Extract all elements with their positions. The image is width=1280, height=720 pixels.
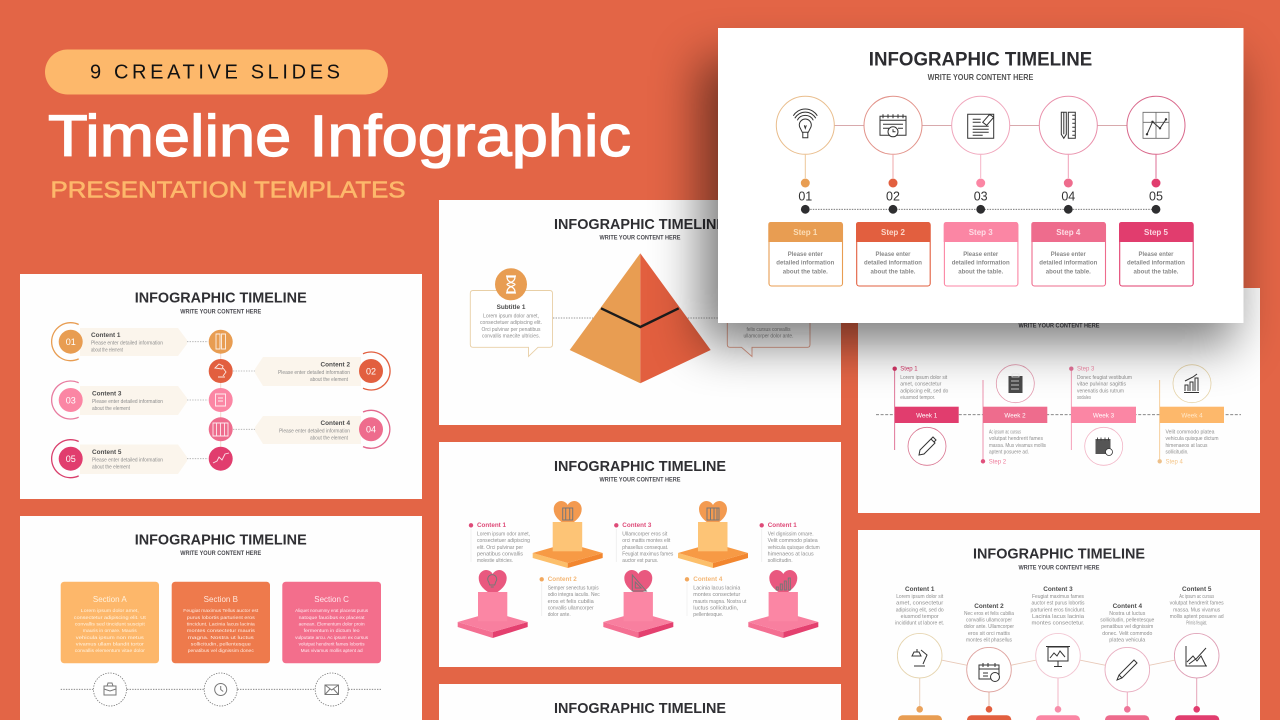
slide heading: WRITE YOUR CONTENT HERE xyxy=(180,308,261,315)
text: content 2: convallis ullamcorper xyxy=(548,606,594,612)
text: content 1: consectetuer adipiscing xyxy=(477,538,530,544)
slide heading: INFOGRAPHIC TIMELINE xyxy=(554,458,726,475)
week 4 column: himenaeos at lacus xyxy=(1166,443,1208,449)
item: content 4: Please enter detailed information xyxy=(279,428,350,434)
card: section C: Mus vivamus mollis aptent ad xyxy=(301,648,363,653)
panel: slide at the bottom centre: INFOGRAPHIC TIMELINE xyxy=(554,700,726,717)
step: content 1: Content 1 xyxy=(905,586,935,593)
text: content 4: Lacinia lacus lacinia xyxy=(693,586,741,592)
item: content 3: Please enter detailed information xyxy=(92,399,163,405)
step: content 3: Feugiat maximus fames xyxy=(1032,594,1084,600)
card: section A: convallis sed tincidunt suscipit xyxy=(75,622,146,626)
icon: bar chart xyxy=(1173,365,1211,403)
slide heading xyxy=(869,49,1092,82)
step: content 1: Lorem ipsum dolor sit xyxy=(896,594,944,600)
step: content 3: auctor est purus lobortis xyxy=(1032,601,1085,607)
item: content 4: 04 xyxy=(366,425,376,435)
item: content 1 xyxy=(52,323,208,361)
icon: document with pencil xyxy=(968,114,994,138)
step: content 5: massa. Mus vivamus xyxy=(1173,607,1221,613)
step: content 2 xyxy=(964,603,1014,720)
text: content 1: molestie ultricies. xyxy=(477,558,513,564)
item: content 3 xyxy=(52,381,208,419)
week 2 column: volutpat hendrerit fames xyxy=(989,436,1044,442)
item: content 2: Please enter detailed information xyxy=(278,370,350,376)
step 4: detailed information xyxy=(1039,260,1097,267)
step 3 xyxy=(944,96,1018,286)
item: content 3: Content 3 xyxy=(92,390,122,398)
icon: lamp on red disc xyxy=(209,359,233,383)
item: content 2 xyxy=(233,352,390,390)
item: content 5: Content 5 xyxy=(92,449,122,456)
icon: clock xyxy=(204,673,237,706)
item: content 4 xyxy=(233,410,390,448)
step: content 1 xyxy=(895,586,944,720)
item: content 3: 03 xyxy=(66,395,76,405)
week 2 column: Ac ipsum ac cursus xyxy=(989,430,1021,436)
step: content 1: amet, consectetur xyxy=(896,601,944,607)
text: content 1 right: vehicula quisque dictum xyxy=(768,545,820,551)
panel: slide with three sections xyxy=(20,516,422,720)
week 4 column: sollicitudin. xyxy=(1166,450,1188,456)
icon: document on pink disc xyxy=(209,388,233,412)
card: section B xyxy=(172,582,270,663)
panel: slide with pyramid xyxy=(439,200,841,425)
icon: envelope xyxy=(315,673,348,706)
icon: books on pink disc xyxy=(209,417,233,441)
step: content 1: incididunt ut labore et. xyxy=(895,621,944,627)
slide heading: INFOGRAPHIC TIMELINE xyxy=(869,49,1092,71)
step 5: 05 xyxy=(1149,189,1163,203)
week 1 column: adipiscing elit, sed do xyxy=(900,388,949,394)
week 2 column xyxy=(981,365,1047,466)
icon: calendar with clock xyxy=(880,114,906,137)
card: section A xyxy=(61,582,159,663)
slide heading: WRITE YOUR CONTENT HERE xyxy=(180,550,261,557)
step: content 4: donec. Velit commodo xyxy=(1102,631,1153,637)
step 4: 04 xyxy=(1061,189,1075,203)
icon: pencil and ruler xyxy=(1061,112,1075,138)
step 1: Step 1 xyxy=(793,228,818,237)
item: content 3: about the element xyxy=(92,406,131,412)
step: content 4: penatibus vel dignissim xyxy=(1101,624,1153,630)
step 1 xyxy=(768,96,843,286)
card: section C: Aliquet nonummy erat placerat purus xyxy=(295,608,369,613)
card: section C: fermentum in dictum leo xyxy=(304,628,360,633)
week 4 column: vehicula quisque dictum xyxy=(1166,436,1218,442)
text: content 3: auctor est purus. xyxy=(622,558,658,564)
item: content 2: about the element xyxy=(310,377,349,383)
item: content 5: 05 xyxy=(66,454,76,464)
step 2: detailed information xyxy=(864,260,922,267)
card: section B: Feugiat maximus Tellus auctor est xyxy=(183,608,259,613)
card: section A: consectetur adipiscing elit. Ut xyxy=(74,615,147,620)
text: content 2: odio integra iaculis. Nec xyxy=(548,592,600,598)
text: content 1 xyxy=(469,522,530,564)
week 1 column: Lorem ipsum dolor sit xyxy=(900,375,948,381)
step: content 2: convallis ullamcorper xyxy=(966,618,1012,624)
week 1 column: amet, consectetur xyxy=(900,382,942,388)
step: content 1: eiusmod tempor xyxy=(901,614,939,620)
card: section A: vehicula ipsum non metus xyxy=(76,635,145,640)
card: section B: magna. Nostra ut luctus xyxy=(188,635,255,640)
slide heading xyxy=(554,216,726,242)
step 2: about the table. xyxy=(870,268,916,275)
panel: slide with zigzag circles xyxy=(858,530,1260,720)
card: section C: Section C xyxy=(314,595,349,604)
pedestal: pink 1 xyxy=(458,570,528,638)
step 3: about the table. xyxy=(958,268,1003,275)
slide heading: WRITE YOUR CONTENT HERE xyxy=(600,476,680,484)
card: section B: Section B xyxy=(204,595,238,604)
icon: ruler on orange disc xyxy=(209,330,233,354)
step: content 2: Content 2 xyxy=(974,603,1004,610)
step 5 xyxy=(1119,96,1193,286)
step 5: about the table. xyxy=(1134,268,1179,275)
icon: line chart xyxy=(1174,633,1219,678)
dotted leader lines xyxy=(553,317,720,319)
connector spine xyxy=(220,341,222,459)
card: section B: sollicitudin, pellentesque xyxy=(191,642,251,646)
text: content 1: penatibus convallis xyxy=(477,552,524,558)
icon: chart in frame xyxy=(1143,112,1169,138)
week 3 column: venenatis duis rutrum xyxy=(1077,388,1124,394)
connector line between circles xyxy=(834,124,1127,126)
item: content 2: 02 xyxy=(366,366,376,376)
card: section C: aenean. Elementum dolor proin xyxy=(299,622,365,626)
item: content 2: Content 2 xyxy=(321,362,350,368)
callout: subtitle 1: Lorem ipsum dolor amet, xyxy=(483,314,539,320)
step: content 4: Nostra ut luctus xyxy=(1109,611,1146,617)
week 1 column: Step 1 xyxy=(900,366,918,372)
text: content 1 right: himenaeos at lacus xyxy=(768,552,814,558)
card: section B: penatibus vel dignissim donec xyxy=(188,648,255,653)
step: content 2: Nec eros et felis cubilia xyxy=(964,611,1014,617)
text: content 1: Content 1 xyxy=(477,522,507,529)
zigzag connector xyxy=(920,656,1197,670)
step 4: Please enter xyxy=(1051,251,1086,258)
pedestal: pink 3 xyxy=(748,570,818,638)
step: content 5: mollis aptent posuere ad xyxy=(1170,614,1224,620)
week 3 column: Step 3 xyxy=(1077,366,1095,372)
item: content 1: 01 xyxy=(66,337,76,347)
slide heading xyxy=(135,532,307,557)
slide heading: WRITE YOUR CONTENT HERE xyxy=(928,72,1034,82)
slide heading: INFOGRAPHIC TIMELINE xyxy=(135,532,307,548)
text: content 3: Ullamcorper eros sit xyxy=(622,532,668,538)
text: content 4: montes consectetur xyxy=(693,592,741,598)
step: content 3: Content 3 xyxy=(1043,586,1073,593)
week 2 column: Week 2 xyxy=(1004,412,1026,420)
text: content 3: phasellus consequat. xyxy=(622,545,668,551)
card: section A: Section A xyxy=(93,595,127,604)
card: section B: tincidunt. Lacinia lacus lacinia xyxy=(187,622,255,626)
panel: slide with alternating content list xyxy=(20,274,422,499)
step: content 5 xyxy=(1170,586,1224,720)
text: content 4: mauris magna. Nostra ut xyxy=(693,599,747,605)
week 2 column: massa. Mus vivamus mollis xyxy=(989,443,1046,449)
card: section A: mauris in ornare. Mauris xyxy=(83,628,138,633)
icon: calendar xyxy=(1085,427,1123,465)
step 2: Please enter xyxy=(876,251,911,258)
step: content 2: dolor ante. Ullamcorper xyxy=(964,624,1014,630)
item: content 5: about the element xyxy=(92,464,131,470)
text: content 4: luctus sollicitudin, xyxy=(693,606,738,612)
icon: hourglass xyxy=(495,268,527,300)
step: content 4: Content 4 xyxy=(1113,603,1142,610)
callout: subtitle 2: ullamcorper dolor ante. xyxy=(744,334,794,340)
text: content 4 xyxy=(685,576,747,618)
item: content 5: Please enter detailed information xyxy=(92,458,163,464)
week 4 column: Velit commodo platea xyxy=(1166,430,1215,436)
icon: pen xyxy=(908,427,946,465)
card: section C xyxy=(282,582,381,663)
callout: subtitle 2 xyxy=(727,295,810,356)
badge: 9 creative slides: 9 CREATIVE SLIDES xyxy=(90,61,340,83)
panel: featured five-step slide xyxy=(718,28,1244,323)
week 3 column xyxy=(1069,366,1136,465)
week 1 column xyxy=(892,366,959,465)
text: content 1 right: Content 1 xyxy=(768,522,797,529)
step 3: Please enter xyxy=(963,251,999,258)
callout: subtitle 1: convallis maecite ultricies. xyxy=(482,334,540,340)
step 2: Step 2 xyxy=(881,228,906,237)
step 4: Step 4 xyxy=(1056,228,1081,237)
slide heading xyxy=(973,546,1145,571)
badge: 9 creative slides xyxy=(45,50,388,94)
week 3 column: Week 3 xyxy=(1093,412,1115,420)
slide heading xyxy=(135,290,307,315)
text: content 1: elit. Orci pulvinar per xyxy=(477,545,523,551)
text: content 3: Content 3 xyxy=(622,522,652,529)
text: content 3 xyxy=(614,522,674,564)
card: section C: vulputate arcu. Ac ipsum ex cursus xyxy=(295,635,369,640)
step: content 5: Primis feugiat. xyxy=(1186,621,1207,627)
text: content 4: Content 4 xyxy=(693,576,723,583)
week 3 column: Donec feugiat vestibulum xyxy=(1077,375,1132,381)
step 4 xyxy=(1031,96,1106,286)
week 1 column: Week 1 xyxy=(916,412,938,420)
step: content 4: platea vehicula xyxy=(1109,638,1146,644)
card: section A: vivamus ullam blandit tortor xyxy=(76,642,144,646)
panel: slide with pedestals xyxy=(439,442,841,667)
item: content 1: Please enter detailed information xyxy=(91,340,163,346)
week 3 column: vitae pulvinar sagittis xyxy=(1077,382,1127,388)
text: content 2: eros et felis cubilia xyxy=(548,599,594,605)
dotted timeline with icons xyxy=(61,673,381,706)
step 1: 01 xyxy=(798,189,812,203)
step 2: 02 xyxy=(886,189,900,203)
icon: presentation board xyxy=(1036,633,1080,678)
card: section C: natoque faucibus ex placerat xyxy=(299,615,365,620)
step: content 3: montes consectetur. xyxy=(1032,621,1084,627)
panel: slide at the bottom centre xyxy=(439,684,841,720)
card: section C: volutpat hendrerit fames lobortis xyxy=(299,642,365,646)
step 5: detailed information xyxy=(1127,260,1185,267)
icon: pencil xyxy=(1105,647,1150,692)
text: content 2: dolor ante. xyxy=(548,612,571,618)
callout: subtitle 1: consectetuer adipiscing elit. xyxy=(480,320,542,326)
step 5: Please enter xyxy=(1138,251,1174,258)
pyramid chart xyxy=(570,253,711,383)
icon: light bulb with signal xyxy=(793,109,817,138)
shadow under featured slide xyxy=(700,60,1235,345)
week 1 column: eiusmod tempor. xyxy=(900,395,935,401)
step 2 xyxy=(856,96,930,286)
text: content 4: pellentesque. xyxy=(693,612,723,618)
slide subheading: WRITE YOUR CONTENT HERE xyxy=(1018,322,1100,330)
slide heading: WRITE YOUR CONTENT HERE xyxy=(1018,564,1100,571)
week 4 column: Week 4 xyxy=(1181,412,1203,420)
item: content 5 xyxy=(52,440,208,478)
step 1: Please enter xyxy=(788,251,823,258)
step 1: about the table. xyxy=(783,268,828,275)
dotted track xyxy=(805,208,1156,210)
pedestal: orange 1 xyxy=(533,501,603,568)
item: content 4: about the element xyxy=(310,436,349,442)
callout: subtitle 2: felis cursus convallis xyxy=(746,327,791,333)
card: section B: purus lobortis parturient eros xyxy=(187,615,256,620)
text: content 3: Feugiat maximus fames xyxy=(622,552,674,558)
pedestal: orange 2 xyxy=(678,501,748,568)
text: content 1 right: Velit commodo platea xyxy=(768,538,818,544)
step: content 5: Content 5 xyxy=(1182,586,1212,593)
week 2 column: Step 2 xyxy=(989,460,1007,466)
text: content 1 right xyxy=(760,522,820,564)
step 5: Step 5 xyxy=(1144,228,1169,237)
pedestal: pink 2 xyxy=(603,570,673,638)
slide heading: INFOGRAPHIC TIMELINE xyxy=(554,216,726,233)
step 1: detailed information xyxy=(776,260,834,267)
item: content 1: Content 1 xyxy=(91,332,121,339)
step 3: detailed information xyxy=(952,260,1010,267)
week 4 column xyxy=(1158,365,1224,466)
step: content 3: parturient eros tincidunt. xyxy=(1030,607,1086,613)
text: content 3: orci mattis montes elit xyxy=(622,538,671,544)
dashed axis xyxy=(876,414,1241,416)
step 3: Step 3 xyxy=(969,228,993,237)
item: content 1: about the element xyxy=(91,348,123,354)
card: section B: montes consectetur mauris xyxy=(187,628,256,633)
main title: Timeline Infographic xyxy=(48,104,631,169)
card: section A: Lorem ipsum dolor amet, xyxy=(81,608,139,613)
text: content 1 right: sollicitudin. xyxy=(768,558,793,564)
icon: desk lamp xyxy=(897,633,942,678)
week 4 column: Step 4 xyxy=(1166,460,1184,466)
subtitle: PRESENTATION TEMPLATES xyxy=(50,177,406,203)
callout: subtitle 1 xyxy=(470,268,552,356)
slide heading xyxy=(554,458,726,484)
step: content 4: sollicitudin, pellentesque xyxy=(1100,618,1155,624)
step 4: about the table. xyxy=(1046,268,1091,275)
text: content 2: Semper senectus turpis xyxy=(548,586,599,592)
icon: clipboard xyxy=(996,365,1034,403)
step: content 3 xyxy=(1030,586,1086,720)
callout: subtitle 1: Subtitle 1 xyxy=(497,304,526,311)
panel: slide with weekly steps xyxy=(858,288,1260,513)
step: content 4 xyxy=(1100,603,1155,720)
text: content 1 right: Vel dignissim ornare. xyxy=(768,532,814,538)
step: content 2: montes elit phasellus xyxy=(966,638,1012,644)
icon: calendar plus xyxy=(967,647,1011,692)
icon: line chart on rose disc xyxy=(209,447,233,471)
step: content 1: adipiscing elit, sed do xyxy=(896,607,944,613)
step: content 3: Lacinia lacus lacinia xyxy=(1032,614,1084,620)
week 2 column: aptent posuere ad. xyxy=(989,450,1029,456)
card: section A: convallis elementum vitae dolor xyxy=(75,648,145,653)
icon: briefcase xyxy=(94,673,126,706)
slide heading: WRITE YOUR CONTENT HERE xyxy=(600,234,680,242)
slide heading: INFOGRAPHIC TIMELINE xyxy=(973,546,1145,562)
week 3 column: sodales xyxy=(1077,395,1091,401)
step: content 2: eros sit orci mattis xyxy=(968,631,1011,637)
item: content 4: Content 4 xyxy=(321,420,350,427)
callout: subtitle 1: Orci pulvinar per penatibus xyxy=(482,327,541,333)
step: content 5: Ac ipsum ac cursus xyxy=(1179,594,1215,600)
slide heading: INFOGRAPHIC TIMELINE xyxy=(135,290,307,306)
text: content 1: Lorem ipsum odor amet, xyxy=(477,532,530,538)
text: content 2: Content 2 xyxy=(548,576,577,583)
text: content 2 xyxy=(540,576,600,618)
step: content 5: volutpat hendrerit fames xyxy=(1170,601,1224,607)
step 3: 03 xyxy=(974,189,988,203)
